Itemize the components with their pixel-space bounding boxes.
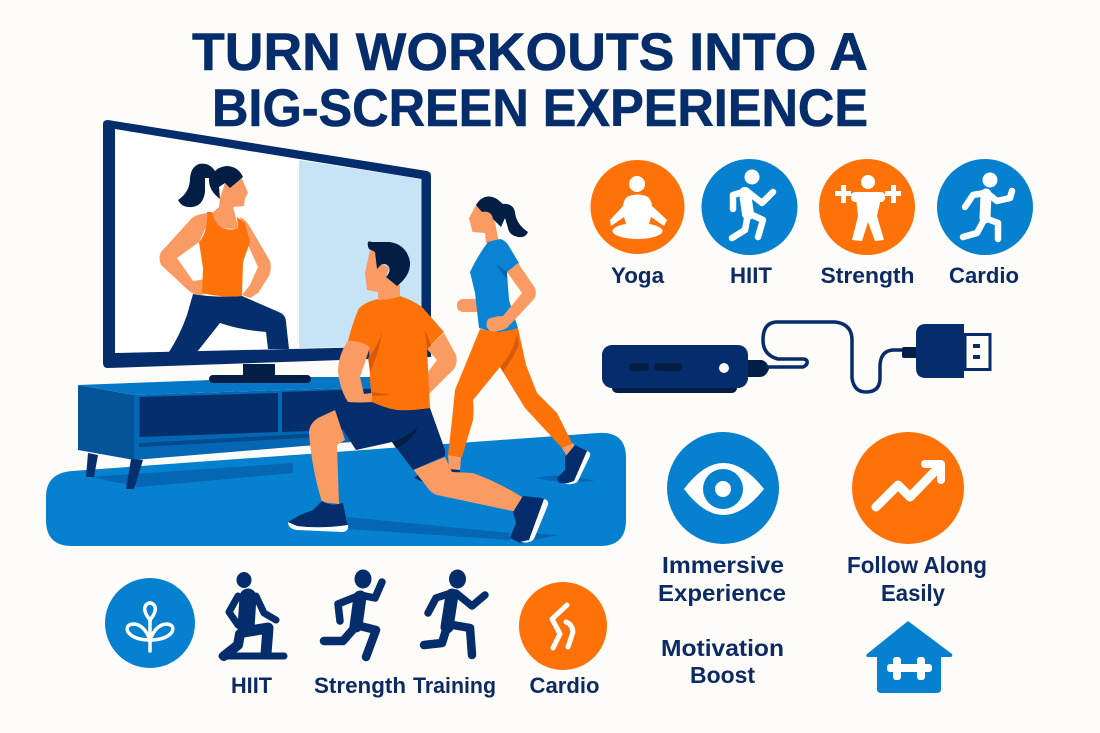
runner rear foot [414,468,460,483]
man back leg [392,442,522,512]
man face and neck [365,250,400,300]
label: immersive experience: Immersive [662,552,784,578]
runner leggings [448,328,572,457]
title: BIG-SCREEN EXPERIENCE [212,79,868,138]
label: yoga: Yoga [611,263,665,288]
label: hiit bottom: HIIT [231,673,273,698]
runner tee [470,239,519,332]
trainer tank top [199,212,250,297]
man shorts [335,402,445,470]
man back arm [422,333,457,396]
icon: yoga [590,160,684,254]
tv screen light panel [299,160,422,348]
tv console [78,377,400,489]
runner hair [476,197,528,237]
label: follow along easily: Easily [881,580,945,606]
device shadow base [612,380,737,393]
runner arm [486,263,536,332]
label: immersive experience [658,552,786,606]
icon: hiit [702,159,798,255]
floor mat [46,433,626,546]
label: strength: Strength [820,263,914,288]
trainer neck and face [211,179,248,229]
icon: strength figure [324,570,382,657]
man shirt creases [368,330,431,396]
label: strength training: Strength [314,673,406,698]
trainer pants [169,294,289,352]
icon: strength [819,159,915,255]
icon: training figure [424,570,485,655]
icon: cardio squiggle [519,582,607,670]
title [192,23,868,138]
television [103,120,431,383]
man front shoe [288,501,348,531]
cable [763,322,905,392]
man hair [368,242,410,286]
icon: leaf [105,578,195,668]
label: strength training [314,673,496,698]
man front leg [309,410,345,504]
label: strength training: Training [413,673,496,698]
console legs [86,453,143,489]
runner front ankle [562,443,575,458]
label: motivation boost [661,635,784,688]
trainer right arm [240,217,271,298]
label: motivation boost: Motivation [661,635,784,661]
title: TURN WORKOUTS INTO A [192,23,868,82]
on-screen trainer [160,164,289,352]
runner forward hand [457,299,481,312]
tv stand [209,364,311,383]
icon: hiit figure [222,572,284,656]
runner front shoe [557,445,589,483]
man shirt [348,296,444,410]
icon: eye [667,432,779,544]
label: cardio bottom: Cardio [530,673,600,698]
runner woman [414,197,590,484]
runner face and neck [469,205,499,243]
label: follow along easily: Follow Along [847,552,987,578]
device body [602,345,748,388]
floor shadows [90,463,595,541]
streaming device and cable [602,322,990,393]
icon: growth arrow [852,432,964,544]
trainer hair [178,164,243,207]
icon: home gym [866,621,952,693]
lunging man [288,242,548,543]
label: hiit: HIIT [730,263,773,288]
trainer left arm [160,213,218,295]
icon: cardio [937,159,1033,255]
label: follow along easily [847,552,987,606]
usb plug [916,324,964,378]
label: immersive experience: Experience [658,580,786,606]
label: cardio: Cardio [949,263,1019,288]
man rear shoe [510,496,547,543]
man front arm [338,341,372,402]
label: motivation boost: Boost [690,662,755,688]
